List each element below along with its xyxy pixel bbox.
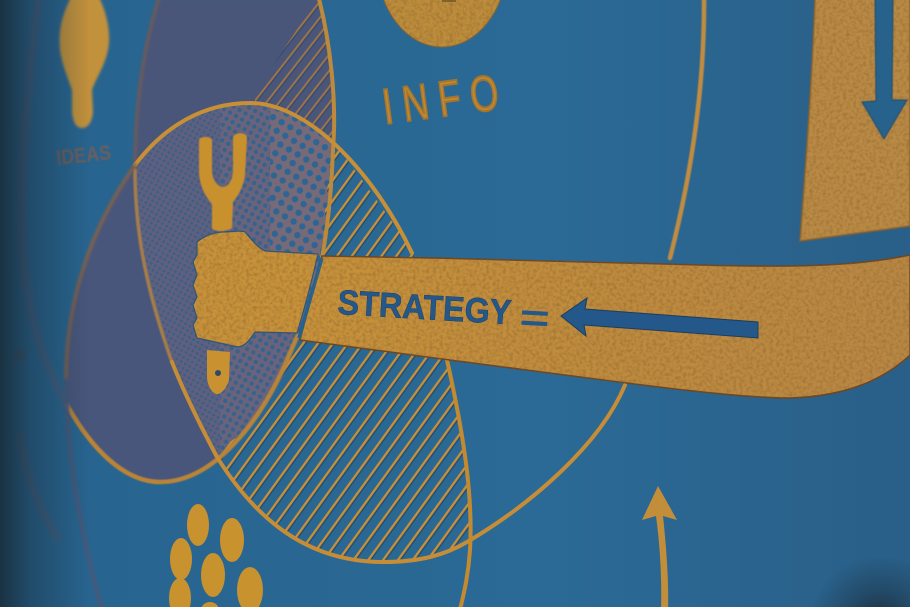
circle B outline, left to bottom — [172, 362, 625, 562]
fork bottom — [207, 350, 230, 394]
strategy arm — [193, 133, 910, 398]
paper grain on orange shapes — [193, 0, 910, 398]
small faded dot — [14, 349, 26, 361]
dotted centre of the venn diagram — [136, 105, 332, 456]
hatched region: upper right of circle — [324, 150, 414, 257]
purple overlap region: lower left lens — [67, 171, 216, 480]
circle B outline, upper right — [670, 0, 704, 258]
bottom right vignette — [790, 550, 910, 607]
hatched region: lower venn area — [220, 341, 469, 560]
label: info: INFO — [379, 64, 512, 135]
circle A outline, blurred left — [22, 0, 67, 405]
icon: light bulb — [60, 0, 109, 128]
circle B outline, left blurred — [135, 0, 160, 170]
hand — [193, 231, 318, 347]
dot cluster icon — [169, 504, 263, 607]
faint arc far left — [20, 433, 58, 538]
icon: top circle — [377, 0, 507, 47]
purple overlap region: upper lens — [136, 0, 332, 160]
circle A outline, upper right — [318, 0, 334, 258]
circle C outline, top and right — [135, 103, 412, 253]
circle C outline, lower right — [447, 360, 471, 607]
down arrow — [862, 0, 907, 139]
strategy label: STRATEGY — [337, 283, 513, 332]
equals sign: = — [519, 297, 551, 341]
top right orange box with down arrow — [193, 0, 910, 398]
arm band — [300, 255, 910, 398]
box — [800, 0, 910, 241]
left vignette — [0, 0, 90, 607]
circle A outline, lower — [67, 335, 298, 482]
label: ideas: IDEAS — [55, 141, 112, 170]
venn circle outlines — [20, 0, 704, 607]
circle C outline, left blurred — [66, 165, 135, 380]
fork top — [199, 133, 247, 231]
fork hole — [215, 370, 221, 376]
gap between hand and arm — [299, 258, 322, 338]
circle B outline, left side — [135, 170, 172, 362]
arrow pointing left — [561, 298, 758, 338]
circle C outline, bottom blurred — [66, 380, 102, 607]
up arrow — [642, 486, 677, 607]
